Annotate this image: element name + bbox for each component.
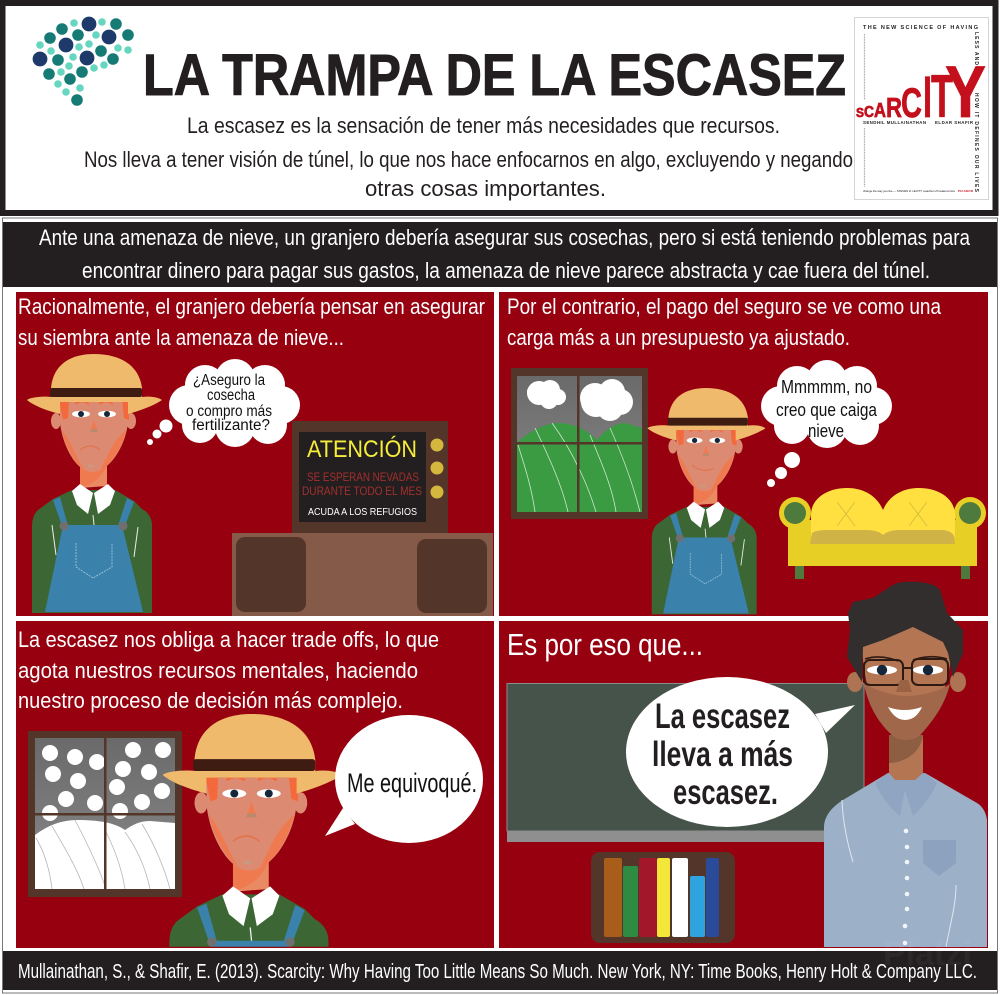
header panel — [2, 3, 996, 213]
window with snow — [28, 731, 182, 897]
book cover: Scarcity: A — [874, 100, 886, 122]
speech bubble: lleva a más — [652, 735, 793, 774]
television: ATENCIÓN — [307, 436, 417, 463]
panel 4 heading: Es por eso que... — [507, 627, 703, 662]
book cover: Scarcity: change the way you live — STEVEN D. LEVITT, coauthor of Freakonomics — [863, 189, 956, 193]
bookshelf — [591, 852, 735, 943]
book cover: Scarcity — [854, 18, 988, 200]
speech bubble — [325, 715, 483, 843]
thought bubble: o compro más — [186, 403, 272, 420]
farmer sad — [163, 714, 342, 947]
watermark: Platzi — [883, 935, 972, 973]
panel 3 text: nuestro proceso de decisión más complejo. — [18, 688, 403, 713]
television: DURANTE TODO EL MES — [302, 486, 422, 498]
thought bubble: ¿Aseguro la — [193, 372, 265, 389]
subtitle text: otras cosas importantes. — [365, 176, 606, 201]
thought bubble — [147, 359, 300, 447]
intro band — [3, 222, 997, 287]
panel 2 text: carga más a un presupuesto ya ajustado. — [507, 325, 850, 350]
book cover: Scarcity: LESS AND — [973, 32, 979, 65]
thought bubble — [761, 360, 892, 487]
title: LA TRAMPA DE LA ESCASEZ — [143, 43, 846, 108]
television: SE ESPERAN NEVADAS — [307, 472, 419, 484]
footer citation — [3, 951, 997, 990]
book cover: Scarcity: C — [901, 79, 922, 126]
panel 2 text: Por el contrario, el pago del seguro se ve como una — [507, 294, 942, 319]
panel 3 text: La escasez nos obliga a hacer trade offs, lo que — [18, 627, 439, 652]
thought bubble: cosecha — [207, 387, 255, 404]
book cover: Scarcity: T — [931, 63, 953, 130]
book cover: Scarcity: THE NEW SCIENCE OF HAVING — [863, 25, 978, 31]
panel 2: por el contrario — [499, 292, 988, 616]
speech bubble: Me equivoqué. — [347, 768, 477, 798]
speech bubble — [626, 677, 855, 827]
book cover: Scarcity: ELDAR SHAFIR — [935, 120, 974, 125]
cabinet — [232, 533, 493, 616]
book cover: Scarcity: S — [856, 105, 864, 120]
panel 1: racionalmente — [16, 292, 494, 616]
panel 3 text — [18, 627, 439, 713]
book cover: Scarcity: PICADOR — [958, 189, 974, 193]
farmer smiling — [647, 388, 765, 614]
panel 4: conclusion — [499, 582, 988, 948]
panel 3: trade offs — [16, 621, 494, 948]
book cover: Scarcity: R — [886, 92, 902, 123]
thought bubble: nieve — [808, 421, 844, 441]
book cover: Scarcity: SENDHIL MULLAINATHAN — [863, 120, 926, 125]
thought bubble: fertilizante? — [192, 417, 270, 434]
television: ACUDA A LOS REFUGIOS — [308, 507, 417, 518]
teacher — [824, 582, 987, 947]
panel 3 text: agota nuestros recursos mentales, haciendo — [18, 658, 418, 683]
blackboard — [507, 684, 864, 842]
thought bubble: creo que caiga — [776, 400, 878, 420]
yellow couch — [779, 488, 986, 579]
subtitle text: La escasez es la sensación de tener más necesidades que recursos. — [187, 113, 780, 138]
book cover: Scarcity: Y — [945, 52, 986, 133]
subtitle text: Nos lleva a tener visión de túnel, lo que nos hace enfocarnos en algo, excluyendo y negando — [84, 147, 853, 172]
farmer worried — [27, 354, 162, 613]
thought bubble: Mmmmm, no — [781, 377, 872, 397]
panel 1 text — [18, 294, 485, 350]
window with clouds and fields — [511, 368, 648, 519]
speech bubble: escasez. — [673, 773, 778, 812]
brain logo — [33, 17, 134, 106]
television — [292, 421, 448, 533]
speech bubble: La escasez — [655, 697, 790, 736]
subtitle text — [84, 113, 853, 201]
book cover: Scarcity: I — [923, 65, 932, 130]
panel 1 text: Racionalmente, el granjero debería pensar en asegurar — [18, 294, 485, 319]
panel 1 text: su siembra ante la amenaza de nieve... — [18, 325, 344, 350]
book cover: Scarcity: C — [864, 104, 874, 121]
book cover: Scarcity: HOW IT DEFINES OUR LIVES — [973, 93, 979, 193]
panel 2 text — [507, 294, 942, 350]
